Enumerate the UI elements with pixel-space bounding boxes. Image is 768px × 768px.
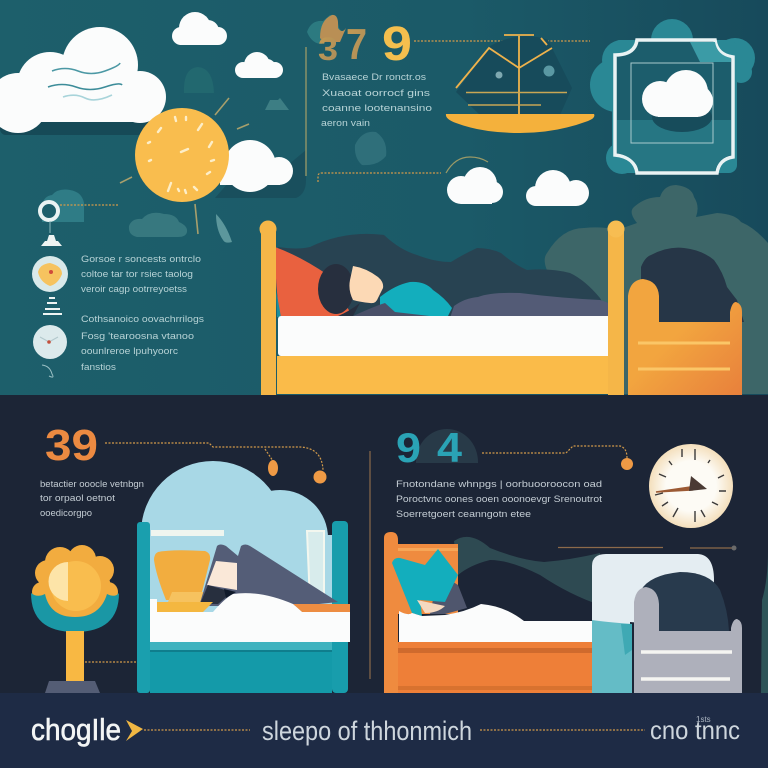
icon: small cloud right of top	[235, 52, 283, 78]
text block: left description one: Gorsoe r soncests ontrclo	[81, 254, 201, 265]
text block: top right description: aeron vain	[321, 118, 370, 129]
panel: lower dark background	[0, 395, 768, 694]
panel: footer band	[0, 693, 768, 768]
icon: balance scale on boat	[446, 35, 594, 133]
text block: left description two: Cothsanoico oovachrrilogs	[81, 314, 204, 325]
text block: lower centre description: Poroctvnc oones ooen ooonoevgr Srenoutrot	[396, 494, 602, 505]
connector: dotted line to orange pins	[105, 443, 326, 484]
text: teal number 94: 9	[396, 424, 421, 471]
text: gold number 379: 9	[382, 18, 412, 71]
illustration: orange chair with dark blob	[628, 248, 744, 395]
icon: node with ring and stand	[40, 202, 118, 246]
icon: faint figure below text	[355, 132, 386, 165]
icon: cloud behind sun	[215, 140, 306, 198]
text block: top right description: Xuaoat oorrocf gins	[322, 88, 430, 99]
text block: left description two	[81, 314, 204, 373]
text block: left description one	[81, 254, 201, 295]
footer: dotted line left	[144, 729, 250, 731]
text block: left description one: veroir cagp ootrreyoetss	[81, 284, 187, 295]
illustration: teal bed with resting person	[137, 461, 350, 693]
connector: dotted line to orange node	[482, 446, 633, 470]
icon: faint striped dome	[184, 67, 214, 93]
icon: large cloud with wind lines	[0, 27, 166, 135]
text: teal number 94	[398, 429, 478, 463]
icon: framed cloud window	[590, 19, 755, 174]
footer: dotted line right	[480, 729, 645, 731]
text block: left description two: oounlreroe lpuhyoorc	[81, 346, 178, 357]
text block: lower left description	[40, 479, 144, 519]
footer: centre title: sleepo of thhonmich	[262, 716, 472, 746]
text: teal number 94: 4	[437, 424, 463, 471]
text: gold number 379	[307, 15, 412, 71]
icon: gauge medallion	[33, 325, 67, 377]
text block: top right description: Bvasaece Dr ronctr.os	[322, 72, 426, 83]
footer: right label: cno tnnc	[650, 715, 740, 745]
icon: faint cloud lower left	[129, 213, 187, 237]
icon: yellow map medallion	[32, 256, 68, 314]
icon: faint mist cloud by node	[42, 190, 84, 222]
icon: sun clock	[120, 98, 249, 243]
text block: left description one: coltoe tar tor rsiec taolog	[81, 269, 193, 280]
illustration: dark blanket hills behind bed	[278, 234, 610, 316]
text block: lower centre description: Soerretgoert ceanngotn etee	[396, 509, 531, 520]
icon: faint small shape	[265, 98, 289, 110]
illustration: grey cloud mass behind chair	[545, 185, 768, 394]
text block: lower centre description	[396, 479, 602, 520]
illustration: lamp with sun globe	[31, 545, 136, 693]
text block: lower left description: betactier ooocle vetnbgn	[40, 479, 144, 490]
icon: two clouds centre	[447, 167, 589, 206]
illustration: orange bed with reading figure	[384, 532, 600, 693]
illustration: light blue headboard panel	[592, 554, 714, 693]
text block: left description two: Fosg 'tearoosna vtanoo	[81, 331, 194, 342]
footer: brand name with arrow: chogIle	[31, 712, 121, 747]
divider: long vertical line	[369, 451, 371, 679]
text block: top right description: coanne lootenansino	[322, 103, 432, 114]
panel: top teal background	[0, 0, 768, 395]
icon: wall clock	[649, 444, 733, 528]
text block: left description two: fanstios	[81, 362, 116, 373]
text block: lower centre description: Fnotondane whnpgs | oorbuooroocon oad	[396, 479, 602, 490]
illustration: grey chair with dark back	[634, 550, 768, 693]
text: gold number 379: 3	[318, 31, 338, 67]
footer: right label: 1sts	[696, 715, 711, 724]
text: orange number 39: 39	[45, 421, 98, 470]
divider: vertical gold line with dashed connector	[306, 41, 590, 182]
text: gold number 379: 7	[346, 20, 367, 69]
text block: lower left description: tor orpaol oetnot	[40, 493, 115, 504]
text block: top right description	[321, 72, 432, 129]
text block: lower left description: ooedicorgpo	[40, 508, 92, 519]
illustration: top bed with sleeping person	[260, 220, 624, 395]
connector: thin line to dot right	[558, 546, 736, 550]
icon: small cloud top	[172, 12, 227, 45]
